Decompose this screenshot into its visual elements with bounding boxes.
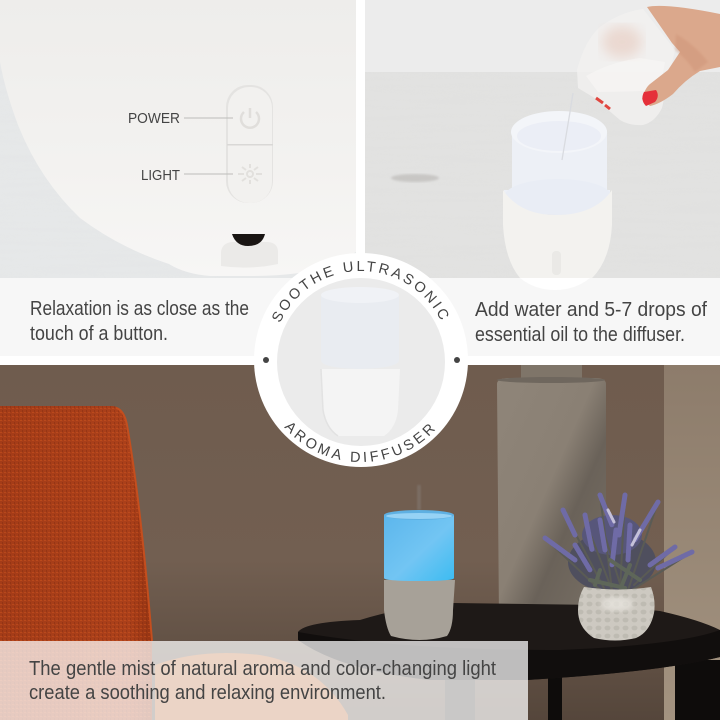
panel: lifestyle scene <box>0 365 720 720</box>
potted lavender <box>545 495 692 640</box>
pillow seen through panel <box>155 653 348 720</box>
round table <box>298 603 720 720</box>
chair <box>0 406 152 720</box>
caption text: add water: Add water and 5-7 drops of <box>475 299 707 321</box>
ceramic pot <box>578 587 655 640</box>
icon: light <box>238 164 262 184</box>
caption text: gentle mist: create a soothing and relaxing environment. <box>29 682 386 704</box>
label: power <box>129 113 233 123</box>
wood surface behind diffuser <box>0 63 356 278</box>
grey inner disc <box>277 278 445 446</box>
water stream <box>562 93 573 160</box>
badge: product seal <box>254 253 468 467</box>
caption text: add water: essential oil to the diffuser. <box>475 324 685 346</box>
measuring cup <box>577 24 665 125</box>
caption text: relaxation: touch of a button. <box>30 323 168 345</box>
caption panel: gentle mist <box>0 641 528 720</box>
curved text: top: SOOTHE ULTRASONIC <box>272 261 448 322</box>
curved text: bottom: AROMA DIFFUSER <box>284 423 436 462</box>
concrete column <box>497 365 606 626</box>
white base <box>503 190 612 278</box>
wall <box>0 365 720 720</box>
band: left caption <box>0 278 360 356</box>
caption text: gentle mist: The gentle mist of natural aroma and color-changing light <box>29 658 496 680</box>
caption text: add water <box>475 299 707 346</box>
button pill <box>226 85 273 203</box>
caption text: gentle mist <box>29 658 496 704</box>
wall <box>365 0 720 72</box>
inner water tank <box>504 111 612 215</box>
label: light <box>142 170 233 180</box>
wall corner <box>664 365 720 720</box>
hand <box>642 6 720 106</box>
mist <box>417 485 421 510</box>
panel: filling the diffuser photo <box>365 0 720 290</box>
label: power: POWER <box>128 110 180 127</box>
product: diffuser <box>321 287 400 436</box>
right dot <box>454 357 460 363</box>
caption text: relaxation: Relaxation is as close as the <box>30 298 249 320</box>
left dot <box>263 357 269 363</box>
white ring <box>254 253 468 467</box>
wood table <box>365 72 720 278</box>
panel: power and light buttons photo <box>0 0 356 278</box>
icon: power <box>241 108 259 128</box>
lavender foliage <box>545 495 692 592</box>
caption text: relaxation <box>30 298 249 345</box>
sensor recess <box>221 234 278 268</box>
diffuser base seen through band <box>520 278 590 290</box>
glowing diffuser <box>384 510 455 640</box>
diffuser body close-up <box>0 0 356 276</box>
band: right caption <box>360 278 720 356</box>
label: light: LIGHT <box>141 167 180 184</box>
